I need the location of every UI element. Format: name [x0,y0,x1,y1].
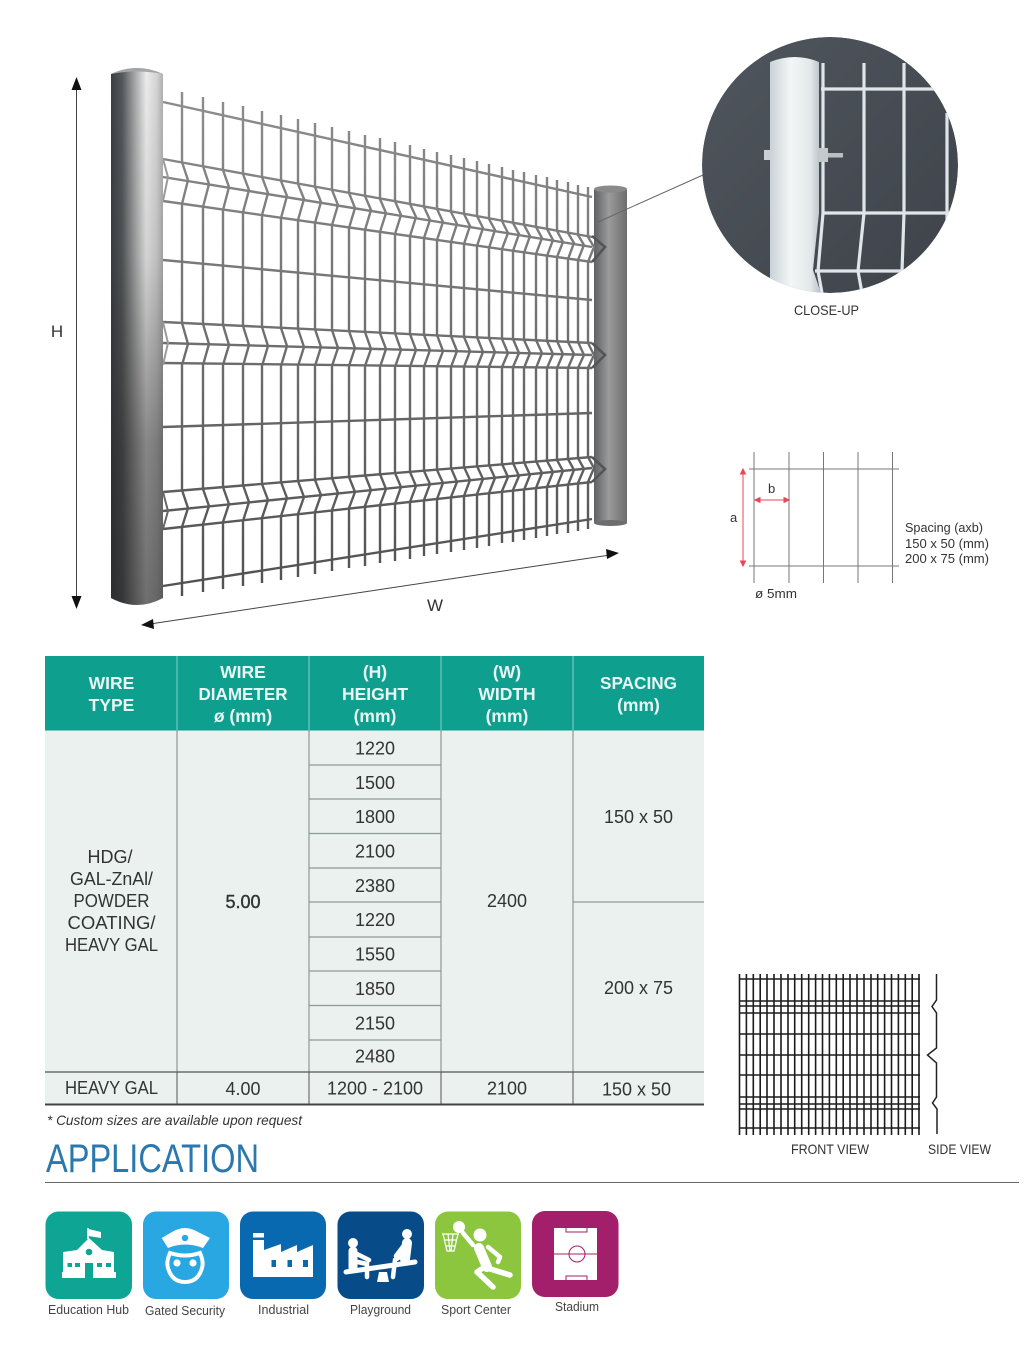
arrow: height dimension [72,77,82,609]
red dimension a [740,469,746,566]
header: spacing: (mm) [617,695,660,715]
height values: 1500 [355,773,395,793]
header: width: (W) [493,662,521,682]
header: width: WIDTH [478,684,536,704]
wire type cell: HEAVY GAL [65,935,158,955]
header: height [342,662,408,726]
heavy gal row: 2100 [487,1078,527,1098]
label: playground: Playground [350,1303,411,1317]
header: width [478,662,536,726]
close-up bolts [764,148,843,162]
height values: 2380 [355,876,395,896]
red dimension b [755,498,789,502]
spacing note: 200 x 75 (mm) [905,551,989,566]
height values: 1800 [355,807,395,827]
wire type cell: HDG/ [88,847,132,867]
wire type cell: POWDER [74,891,150,911]
height values: 1220 [355,738,395,758]
header: width: (mm) [486,706,528,726]
icon: sport center [435,1212,521,1299]
arrow: width dimension [141,549,619,629]
header: wire diameter [198,662,288,726]
height values: 2150 [355,1014,395,1034]
close-up photo circle [702,37,958,293]
spacing values: 200 x 75 [604,978,673,998]
heavy gal row: 4.00 [225,1079,261,1099]
heavy gal row: 150 x 50 [602,1080,671,1100]
close-up mesh wires [815,63,955,293]
heavy gal row: 1200 - 2100 [327,1078,423,1098]
specification table [45,656,704,1104]
label: sport center: Sport Center [441,1303,511,1317]
heading: application: APPLICATION [46,1137,259,1181]
close-up post [770,57,821,293]
header: spacing [600,673,677,715]
header: height: (mm) [354,706,396,726]
spacing note [905,520,989,566]
front view caption: FRONT VIEW [791,1141,870,1157]
header: wire type: WIRE [89,673,134,693]
spacing values: 150 x 50 [604,807,673,827]
header: wire diameter: ø (mm) [214,706,272,726]
table header background [45,656,704,730]
header: height: HEIGHT [342,684,408,704]
spacing diagram: a [730,510,738,525]
left fence post [111,68,163,605]
table body background [45,730,704,1104]
callout line to close-up [598,175,703,222]
right fence post [594,186,627,526]
fence illustration [111,68,627,605]
height values [355,738,395,1066]
header: wire type [89,673,134,715]
height values: 2480 [355,1046,395,1066]
width value: 2400 [487,891,527,911]
spacing note: 150 x 50 (mm) [905,536,989,551]
spacing diagram [730,452,899,601]
heavy gal row: HEAVY GAL [65,1078,158,1098]
front view mesh drawing [739,974,920,1135]
application divider [45,1182,1019,1184]
icon: industrial [240,1212,326,1299]
height values: 1550 [355,944,395,964]
wire type cell: GAL-ZnAl/ [70,869,153,889]
wire type cell [65,847,158,955]
label: W: W [427,596,443,615]
label: industrial: Industrial [258,1303,309,1317]
label: education hub: Education Hub [48,1303,129,1317]
wire mesh panel [163,92,605,596]
icon: gated security [143,1212,229,1299]
header: wire diameter: WIRE [220,662,266,682]
wire type cell: COATING/ [68,913,156,933]
spacing diagram: b [768,481,775,496]
side view caption: SIDE VIEW [928,1141,992,1157]
label: H: H [51,322,63,341]
icon: playground [338,1212,424,1299]
label: stadium: Stadium [555,1300,599,1314]
header: wire type: TYPE [89,695,134,715]
header: height: (H) [363,662,387,682]
wire diameter value: 5.00 [225,892,261,912]
height values: 2100 [355,842,395,862]
label: gated security: Gated Security [145,1304,226,1318]
icon: stadium [532,1211,618,1297]
spacing note: Spacing (axb) [905,520,983,535]
custom sizes note: * Custom sizes are available upon request [47,1112,303,1128]
side view profile [928,974,937,1134]
close-up caption: CLOSE-UP [794,302,859,318]
header: wire diameter: DIAMETER [198,684,288,704]
height values: 1220 [355,910,395,930]
spacing diagram: ø 5mm [755,586,797,601]
icon: education hub [46,1212,132,1299]
heavy gal row [65,1078,671,1100]
header: spacing: SPACING [600,673,677,693]
spacing values [604,807,673,998]
height values: 1850 [355,979,395,999]
